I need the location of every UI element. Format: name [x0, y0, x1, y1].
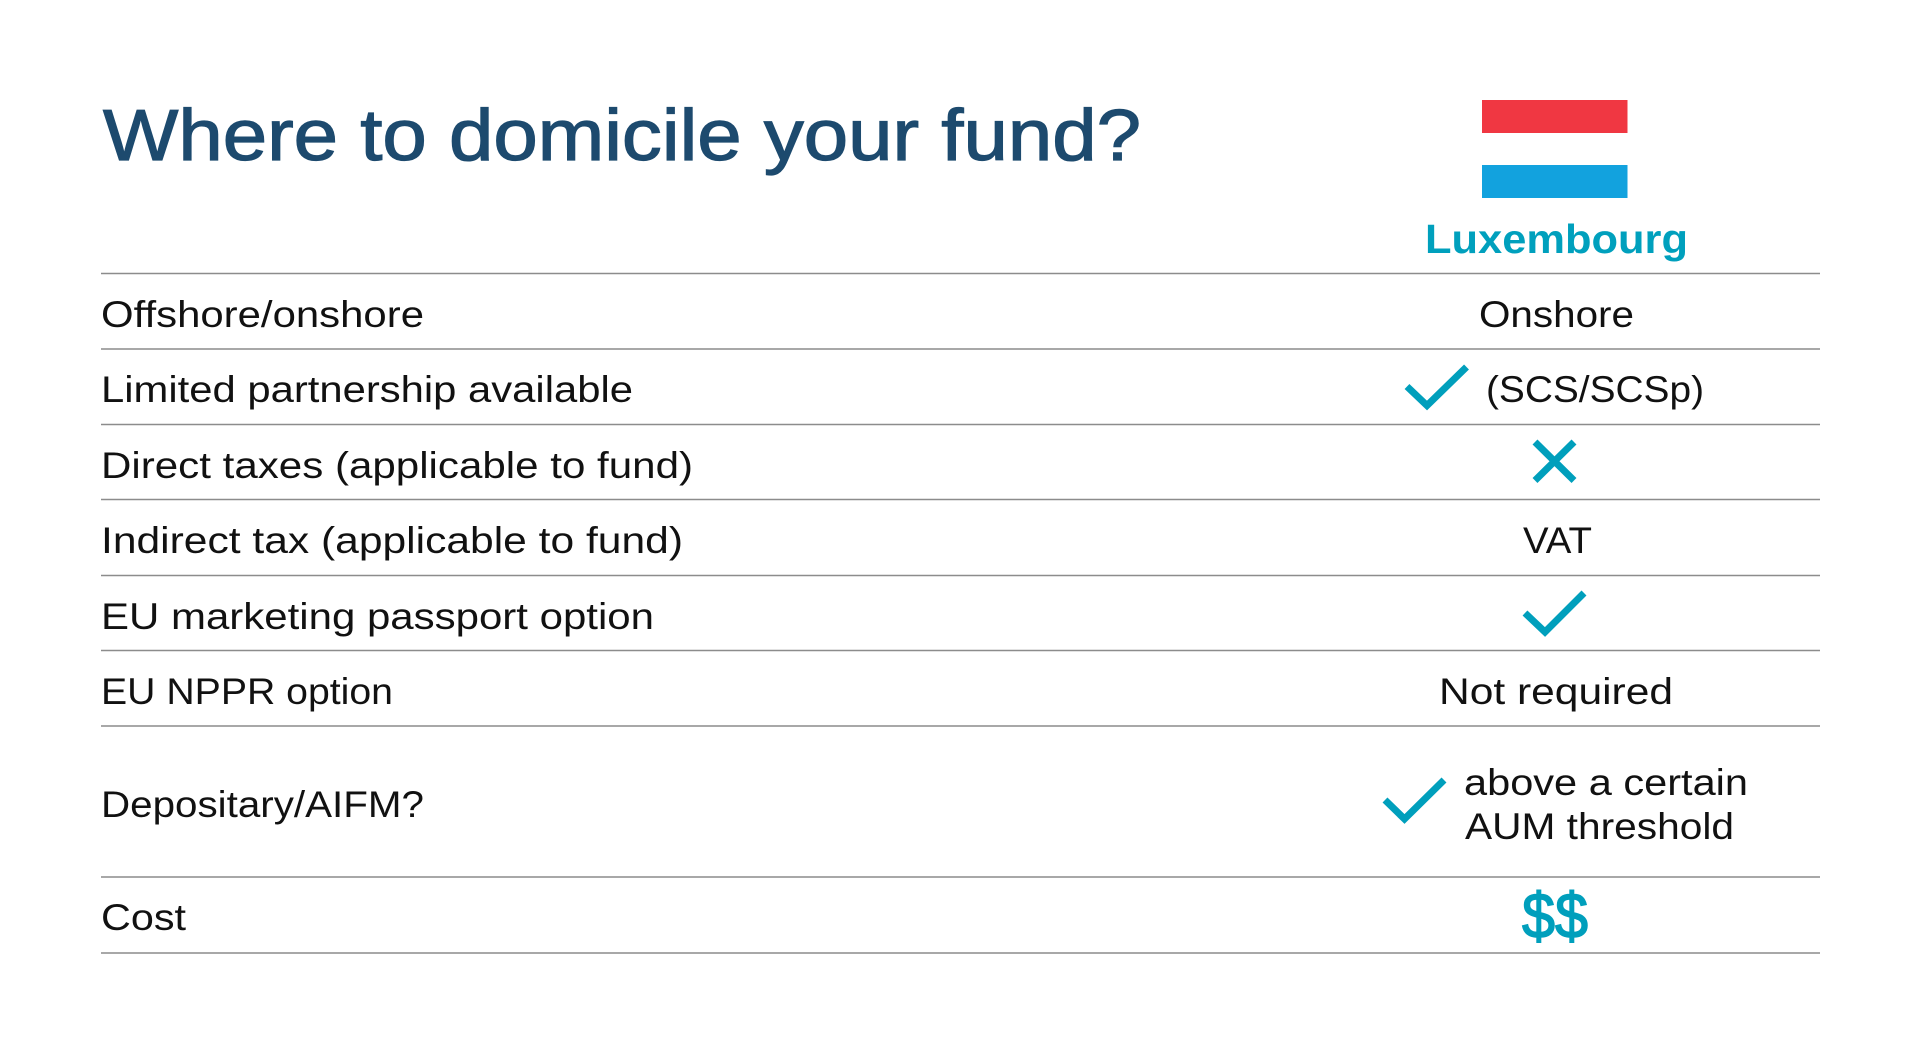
row: cost — [101, 880, 1588, 952]
icon: check mark — [1385, 780, 1444, 819]
row: indirect tax: VAT — [1523, 520, 1592, 561]
column header: Luxembourg — [1425, 100, 1688, 262]
row: limited partnership — [101, 367, 1704, 410]
cost value: two dollar signs: $$ — [1522, 880, 1588, 952]
limited partnership value: (SCS/SCSp) — [1486, 369, 1704, 410]
icon: check mark — [1407, 367, 1466, 406]
row: depositary/AIFM — [101, 762, 1748, 847]
row: limited partnership: Limited partnership available — [101, 369, 633, 410]
row: EU marketing passport — [101, 593, 1584, 637]
row: direct taxes: Direct taxes (applicable to fund) — [101, 445, 693, 486]
icon: cross — [1535, 442, 1574, 480]
icon: check mark — [1525, 593, 1584, 632]
icon: Luxembourg flag — [1482, 100, 1628, 198]
row: depositary/AIFM: Depositary/AIFM? — [101, 784, 424, 825]
row: direct taxes — [101, 442, 1574, 486]
row: cost: Cost — [101, 897, 187, 938]
row: offshore/onshore — [101, 294, 1634, 335]
country name: Luxembourg — [1425, 216, 1688, 262]
row: EU NPPR: EU NPPR option — [101, 671, 393, 712]
row: indirect tax — [101, 520, 1592, 561]
row: offshore/onshore: Onshore — [1479, 294, 1634, 335]
row: offshore/onshore: Offshore/onshore — [101, 294, 424, 335]
row: EU marketing passport: EU marketing passport option — [101, 596, 654, 637]
depositary value — [1464, 762, 1748, 847]
depositary value: AUM threshold — [1465, 806, 1734, 847]
row: EU NPPR: Not required — [1439, 671, 1673, 712]
row: EU NPPR — [101, 671, 1673, 712]
depositary value: above a certain — [1464, 762, 1748, 803]
title: Where to domicile your fund? — [103, 96, 1141, 176]
row: indirect tax: Indirect tax (applicable to fund) — [101, 520, 683, 561]
